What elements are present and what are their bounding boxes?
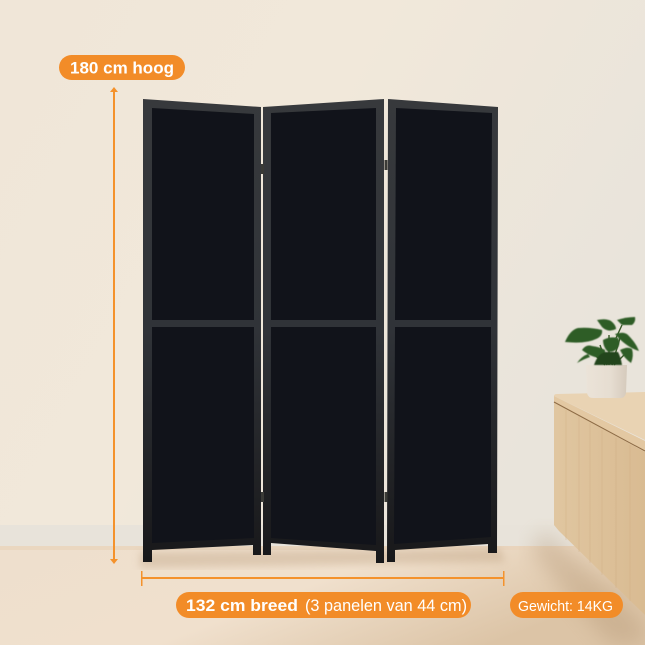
cabinet shadow on floor [530, 530, 645, 645]
plant stems [590, 325, 626, 365]
panel 1 upper fabric [152, 108, 254, 320]
room divider: three panels [143, 99, 498, 563]
background: skirting board [0, 525, 645, 546]
plant leaves [565, 317, 639, 365]
label: width [176, 592, 471, 618]
panel 2 frame [263, 99, 384, 563]
floor shadow under divider [140, 548, 505, 568]
label: height: 180 cm hoog [70, 60, 174, 78]
arrow: height dimension [110, 87, 118, 564]
panel 3 lower fabric [394, 327, 491, 544]
label: width: (3 panelen van 44 cm) [305, 597, 467, 615]
panel 2 [263, 99, 384, 563]
label: weight [510, 592, 623, 618]
furniture: wooden cabinet [554, 392, 645, 615]
panel 3 [387, 99, 498, 562]
panel 2 upper fabric [271, 108, 376, 320]
label: width: 132 cm breed [186, 596, 298, 615]
label: height [59, 55, 185, 80]
panel 3 frame [387, 99, 498, 562]
panel 1 lower fabric [152, 327, 254, 543]
icon: potted plant [565, 317, 639, 398]
hinges [261, 160, 388, 502]
panel 1 frame [143, 99, 261, 562]
plant pot [586, 365, 627, 398]
background: floor [0, 546, 645, 645]
panel 3 upper fabric [395, 108, 492, 320]
label: weight: Gewicht: 14KG [518, 598, 613, 615]
arrow: width dimension [141, 571, 504, 586]
panel 1 [143, 99, 261, 562]
panel 2 lower fabric [271, 327, 376, 545]
